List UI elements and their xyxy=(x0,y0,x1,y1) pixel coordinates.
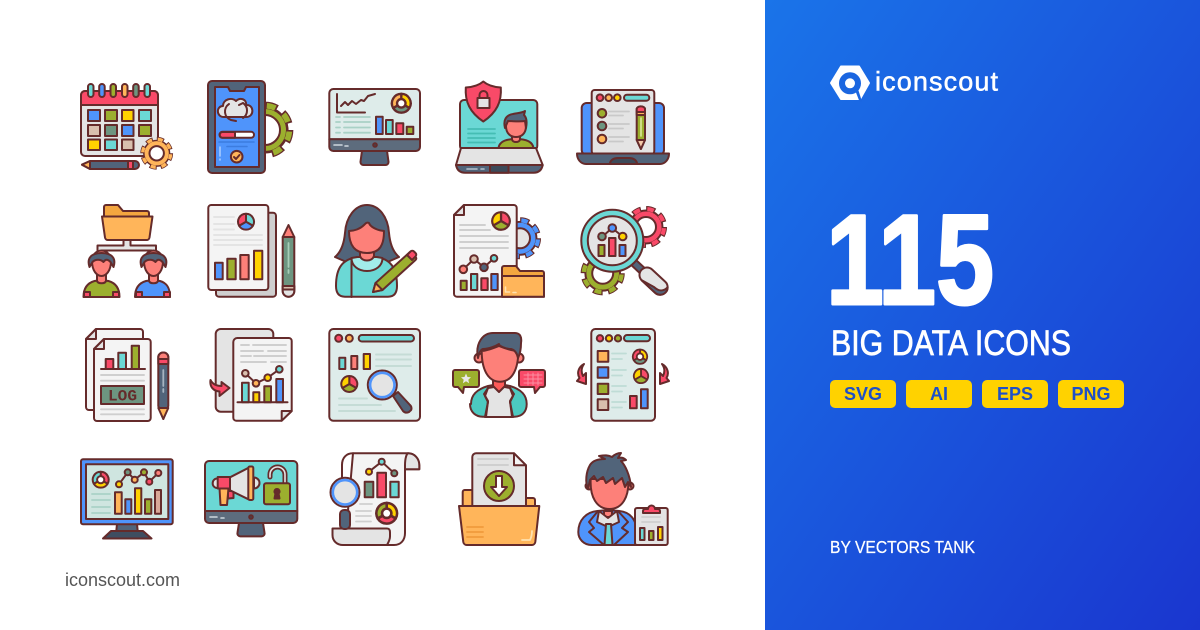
icon: dashboard panel with arrows xyxy=(577,329,669,421)
icon: businessman with clipboard xyxy=(578,453,668,545)
icon: scroll with chart and magnifier xyxy=(330,453,419,545)
author credit: BY VECTORS TANK xyxy=(830,537,975,557)
badge: svg: SVG xyxy=(844,384,882,404)
left white panel xyxy=(0,0,765,630)
icon: monitor with megaphone and open lock xyxy=(205,461,297,536)
icon: laptop with shield and user xyxy=(456,82,543,173)
icon: browser analytics with magnifier xyxy=(329,329,420,421)
icon: monitor dashboard xyxy=(329,89,420,165)
icon: magnifier with gears and chart xyxy=(581,209,671,298)
icon: folder with two users xyxy=(84,205,170,297)
headline number: 115 xyxy=(826,189,994,332)
icon: laptop with checklist xyxy=(577,90,669,164)
icon: download file in folder xyxy=(459,453,539,545)
heading: big data icons: BIG DATA ICONS xyxy=(831,324,1071,363)
icon: man with speech bubbles xyxy=(453,333,545,417)
badge: ai: AI xyxy=(930,384,948,404)
log label: LOG xyxy=(108,388,137,406)
site url: iconscout.com xyxy=(65,570,180,590)
icon: log report and pencil xyxy=(86,329,168,421)
badge: eps: EPS xyxy=(997,384,1033,404)
format badges xyxy=(830,380,1124,408)
icon: calendar with gear xyxy=(81,84,171,169)
icon grid xyxy=(81,81,671,545)
badge: ai xyxy=(906,380,972,408)
icon: phone with cloud and gear xyxy=(208,81,289,173)
badge: png xyxy=(1058,380,1124,408)
badge: svg xyxy=(830,380,896,408)
logo: iconscout xyxy=(831,66,998,102)
logo mark xyxy=(831,66,869,102)
logo wordmark: iconscout xyxy=(875,66,998,96)
right blue panel xyxy=(765,0,1200,630)
badge: png: PNG xyxy=(1071,384,1111,404)
icon: report with pencil xyxy=(208,205,294,297)
icon: report with gear and folder xyxy=(454,205,544,297)
icon: woman with pencil xyxy=(335,205,416,297)
icon: monitor with charts xyxy=(81,459,173,538)
badge: eps xyxy=(982,380,1048,408)
icon: data report transfer xyxy=(210,329,292,421)
